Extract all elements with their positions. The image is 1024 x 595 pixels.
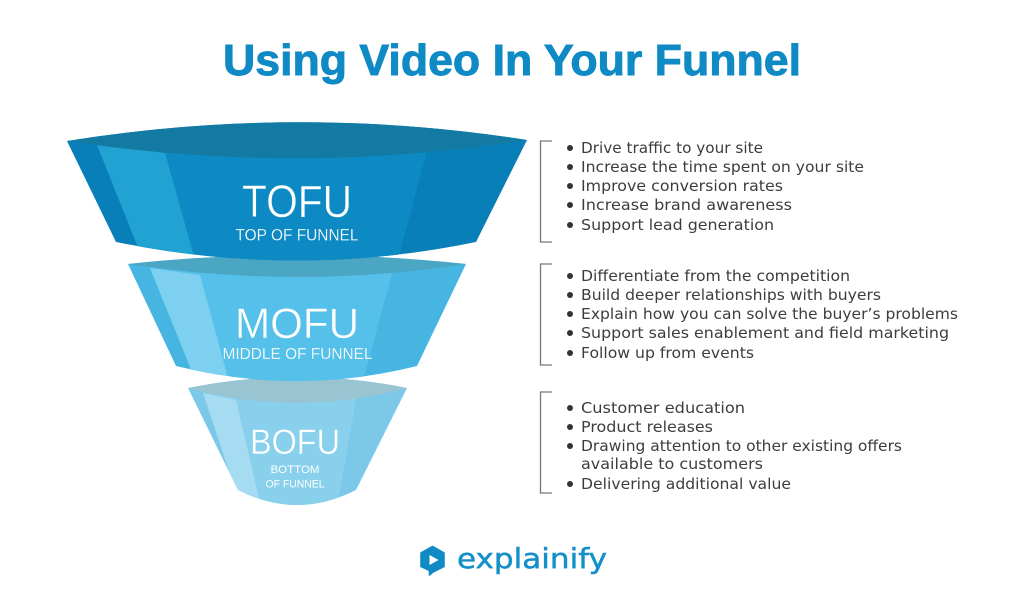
bracket and list: TOFU <box>540 139 864 242</box>
title: Using Video In Your Funnel <box>223 36 801 85</box>
bracket and list: MOFU: Explain how you can solve the buyer’s problems <box>581 305 958 323</box>
panel: BOFU tier: BOFU <box>250 423 340 462</box>
panel: MOFU tier: MIDDLE OF FUNNEL <box>222 346 373 363</box>
bracket and list: MOFU: Build deeper relationships with buyers <box>581 286 881 304</box>
panel: TOFU tier <box>67 122 527 260</box>
bracket and list: BOFU <box>540 392 902 493</box>
bracket and list: BOFU: Product releases <box>581 418 713 436</box>
bracket and list: BOFU: available to customers <box>581 455 763 473</box>
panel: TOFU tier: TOFU <box>242 176 352 227</box>
bracket and list: BOFU: Customer education <box>581 399 745 417</box>
icon: play hexagon <box>421 546 444 575</box>
bracket and list: MOFU: Follow up from events <box>581 344 754 362</box>
logo: explainify: explainify <box>457 542 607 575</box>
panel: MOFU tier: MOFU <box>235 300 359 348</box>
panel: BOFU tier: OF FUNNEL <box>266 478 324 490</box>
bracket and list: BOFU: Delivering additional value <box>581 475 791 493</box>
panel: MOFU tier <box>128 257 466 381</box>
bracket and list: TOFU: Increase brand awareness <box>581 196 792 214</box>
panel: BOFU tier <box>188 379 407 505</box>
bracket and list: TOFU: Drive traffic to your site <box>581 139 763 157</box>
bracket and list: MOFU <box>540 264 958 365</box>
bracket and list: BOFU: Drawing attention to other existing offers <box>581 437 902 455</box>
panel: BOFU tier: BOTTOM <box>270 464 320 476</box>
bracket and list: TOFU: Improve conversion rates <box>581 177 783 195</box>
bracket and list: MOFU: Differentiate from the competition <box>581 267 850 285</box>
panel: TOFU tier: TOP OF FUNNEL <box>236 226 358 244</box>
funnel <box>67 122 527 530</box>
bracket and list: TOFU: Increase the time spent on your site <box>581 158 864 176</box>
bracket and list: MOFU: Support sales enablement and field marketing <box>581 324 949 342</box>
bracket and list: TOFU: Support lead generation <box>581 216 774 234</box>
